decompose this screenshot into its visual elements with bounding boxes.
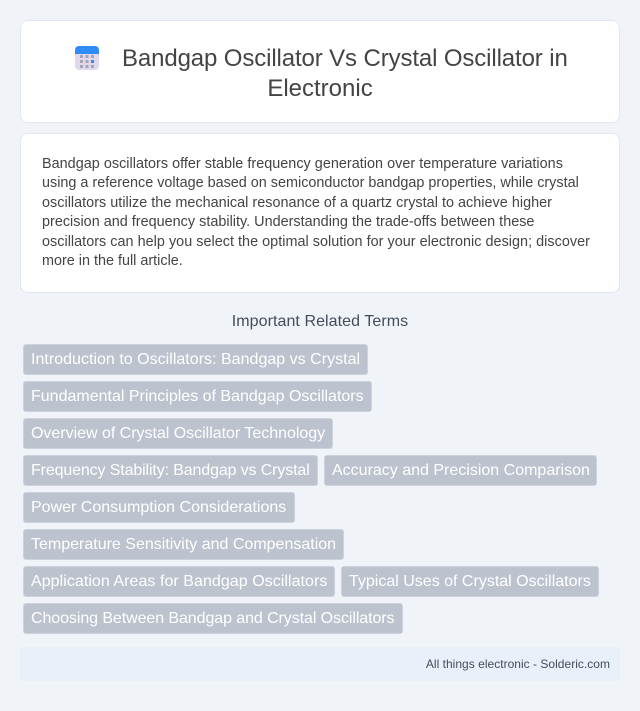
tag: crystal technology: [23, 418, 333, 449]
text block: description: oscillators utilize the mechanical resonance of a quartz crystal to achieve higher: [42, 195, 552, 211]
title: Electronic: [267, 75, 373, 102]
tag: frequency stability: Frequency Stability: Bandgap vs Crystal: [31, 462, 310, 479]
tag: fundamental principles: Fundamental Principles of Bandgap Oscillators: [31, 388, 364, 405]
tag: crystal uses: Typical Uses of Crystal Oscillators: [349, 573, 591, 590]
text block: description: Bandgap oscillators offer stable frequency generation over temperature variations: [42, 156, 563, 172]
tag: temperature sensitivity: Temperature Sensitivity and Compensation: [31, 536, 336, 553]
tag: crystal technology: Overview of Crystal Oscillator Technology: [31, 425, 325, 442]
tag: introduction: [23, 344, 368, 375]
tag: power consumption: Power Consumption Considerations: [31, 499, 286, 516]
tag: accuracy and precision: [324, 455, 597, 486]
text block: description: using a reference voltage based on semiconductor bandgap properties, while crystal: [42, 175, 579, 191]
title: [122, 45, 568, 102]
panel: description card: [20, 133, 620, 293]
text block: description: oscillators can help you select the optimal solution for your electronic design; discover: [42, 234, 590, 250]
tag: choosing between: [23, 603, 403, 634]
tag: frequency stability: [23, 455, 318, 486]
icon: calendar grid: [75, 46, 99, 70]
tag: power consumption: [23, 492, 295, 523]
tag: accuracy and precision: Accuracy and Precision Comparison: [332, 462, 590, 479]
tag: introduction: Introduction to Oscillators: Bandgap vs Crystal: [31, 351, 360, 368]
text block: description: more in the full article.: [42, 253, 183, 269]
title: Bandgap Oscillator Vs Crystal Oscillator in: [122, 45, 568, 72]
tag: choosing between: Choosing Between Bandgap and Crystal Oscillators: [31, 610, 394, 627]
panel: related term tags: [23, 344, 599, 634]
text block: description: precision and frequency stability. Understanding the trade-offs between these: [42, 214, 534, 230]
tag: bandgap applications: Application Areas for Bandgap Oscillators: [31, 573, 327, 590]
tag: bandgap applications: [23, 566, 335, 597]
footer credit: All things electronic - Solderic.com: [426, 657, 610, 671]
panel: header card: [20, 20, 620, 123]
heading: important related terms: Important Related Terms: [232, 313, 408, 330]
tag: fundamental principles: [23, 381, 372, 412]
text block: description: [42, 156, 590, 269]
footer: [20, 647, 620, 681]
tag: crystal uses: [341, 566, 599, 597]
tag: temperature sensitivity: [23, 529, 344, 560]
